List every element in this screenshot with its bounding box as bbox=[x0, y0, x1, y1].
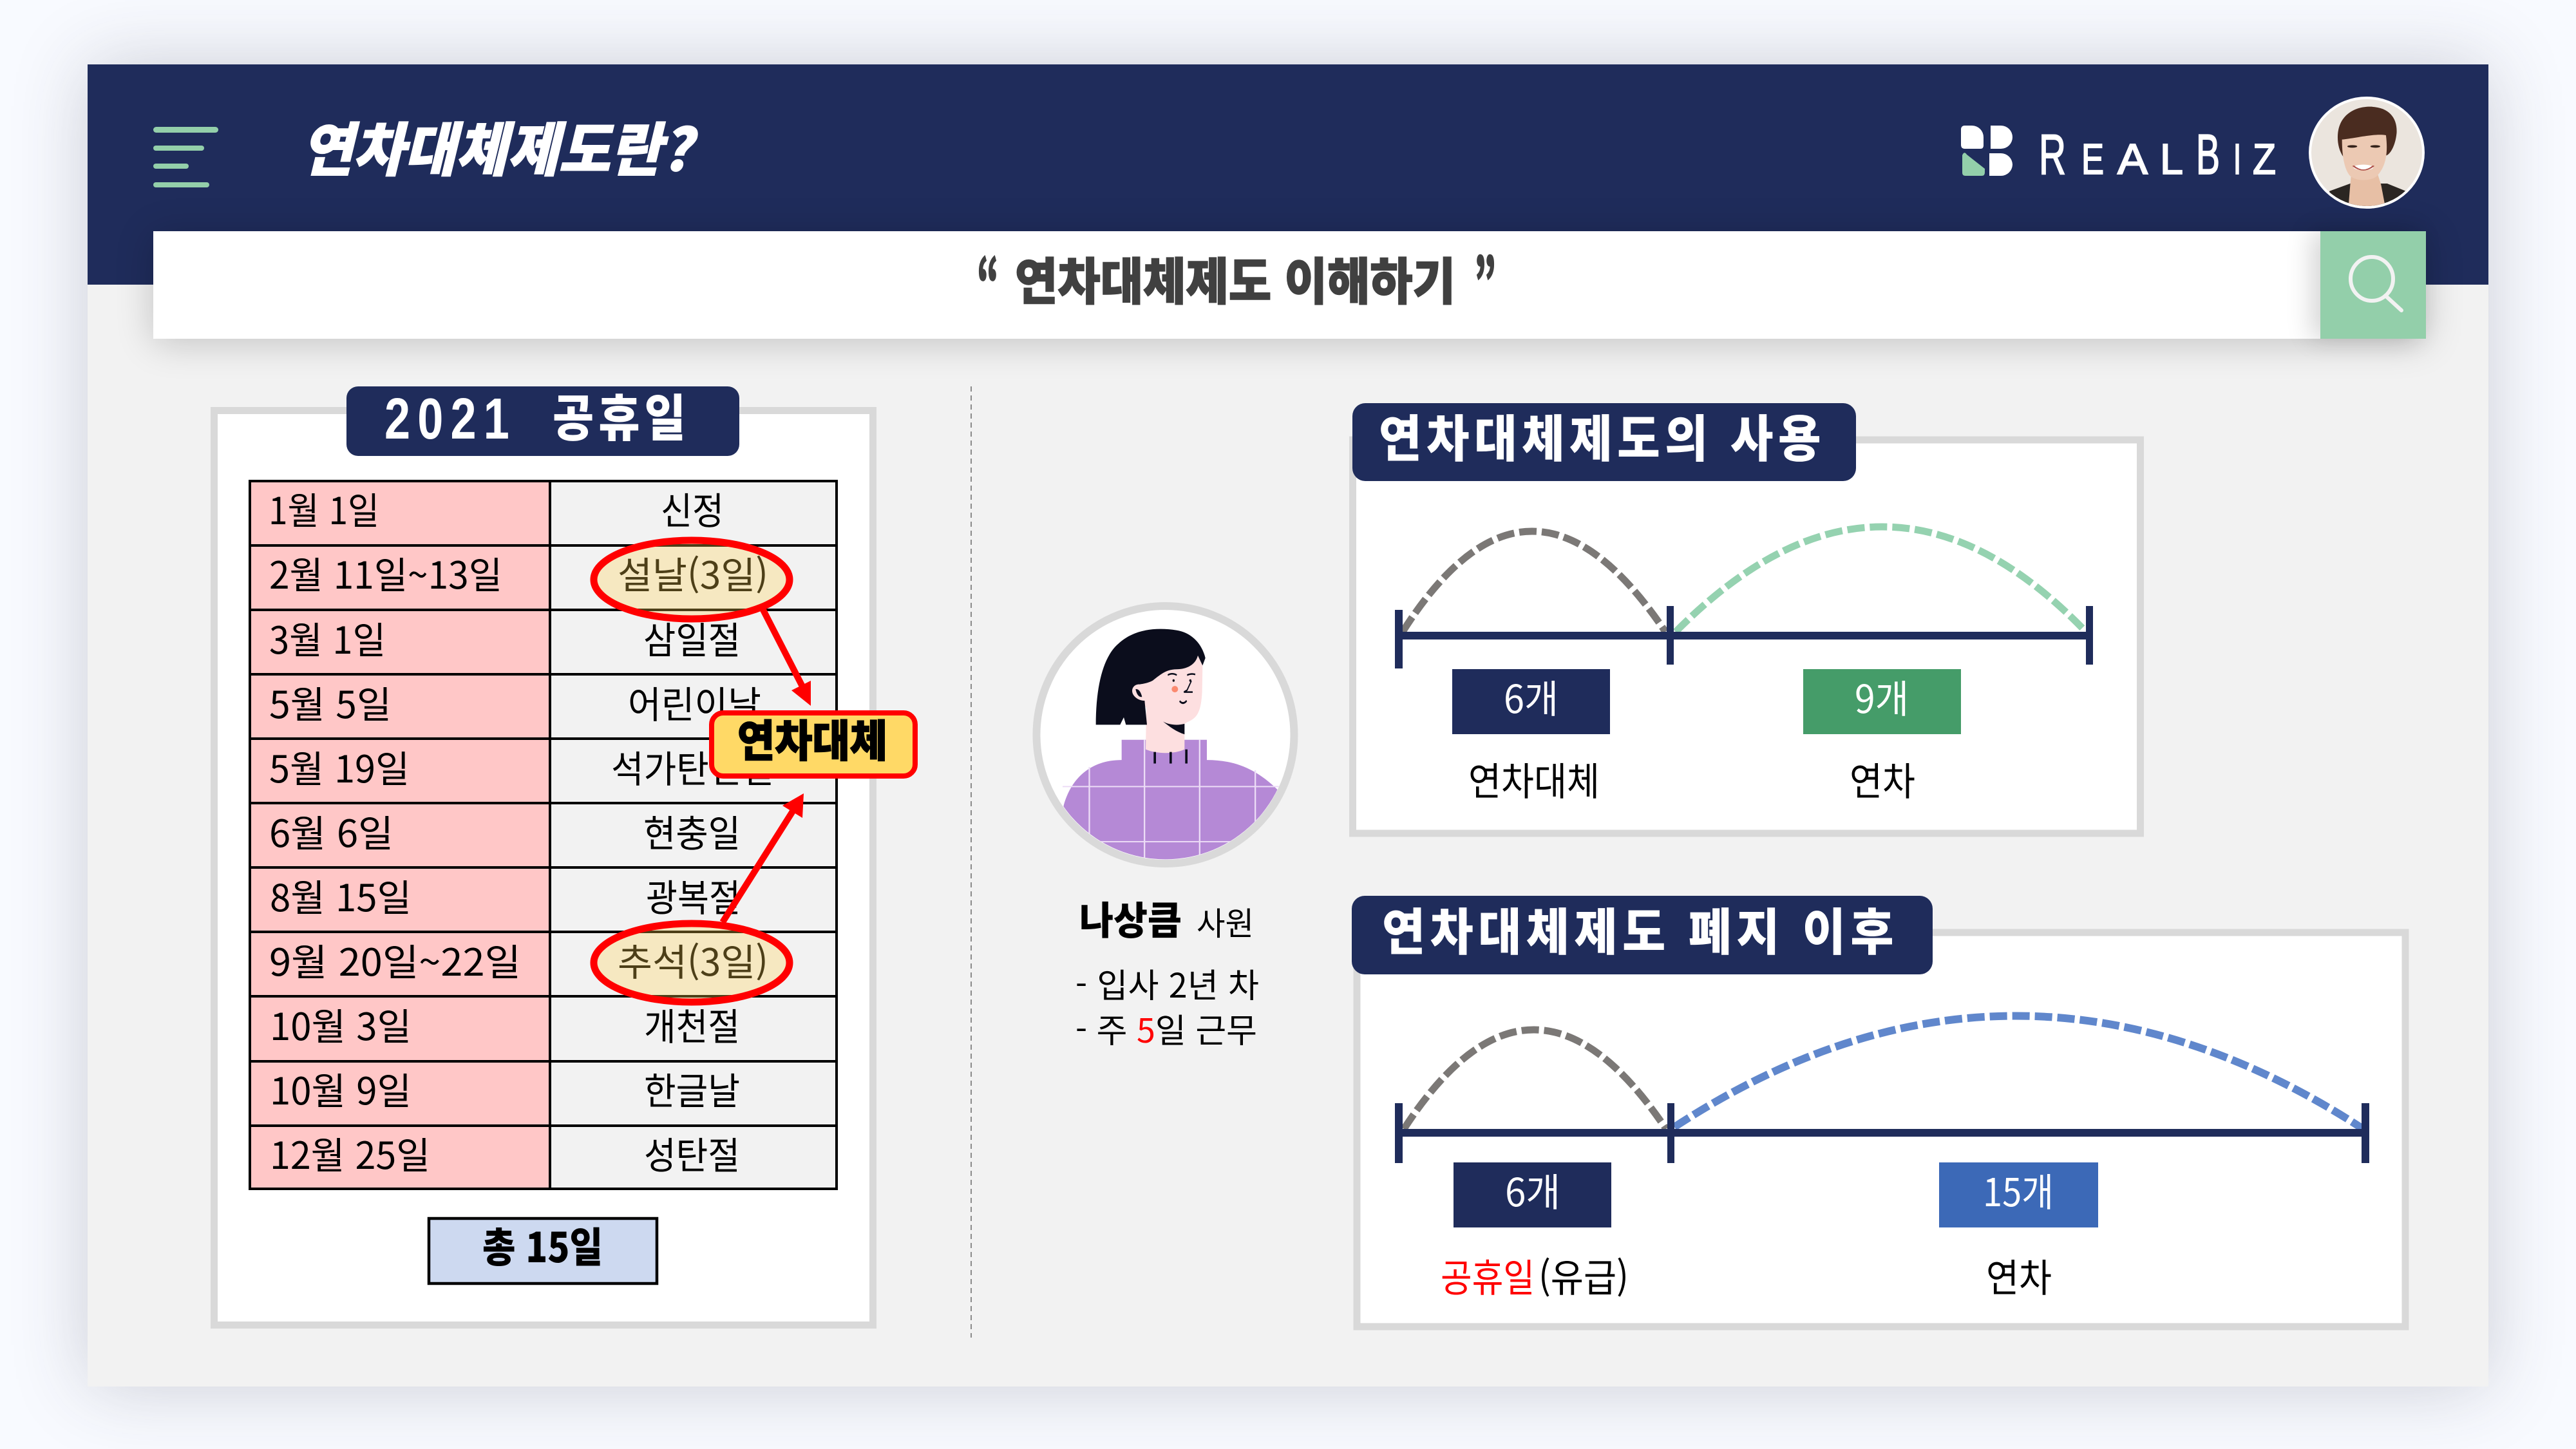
holiday table: 10월 3일 bbox=[270, 997, 412, 1051]
employee details: - 입사 2년 차 bbox=[1075, 959, 1259, 1007]
label: 공휴일(유급): 공휴일 bbox=[1441, 1247, 1535, 1303]
holiday table: 9월 20일~22일 bbox=[269, 933, 521, 987]
holiday table: 추석(3일) bbox=[618, 933, 768, 987]
holiday table: 개천절 bbox=[644, 997, 740, 1051]
panel heading: 연차대체제도의 사용 bbox=[1379, 399, 1826, 471]
holiday table: 6월 6일 bbox=[269, 804, 393, 858]
panel heading: 2021 공휴일: 2021 bbox=[384, 387, 516, 451]
callout: 연차대체: 연차대체 bbox=[737, 706, 887, 770]
search bar bbox=[153, 231, 2426, 339]
label box: 15개 bbox=[1939, 1162, 2098, 1227]
label: 연차: 연차 bbox=[1850, 751, 1915, 807]
logo: RealBiz bbox=[1961, 122, 2276, 186]
holiday table: 5월 5일 bbox=[269, 675, 392, 729]
panel: after abolition bbox=[1352, 893, 2405, 1327]
holiday table: 광복절 bbox=[646, 868, 741, 922]
icon: hamburger menu bbox=[153, 127, 218, 187]
logo wordmark: I bbox=[2233, 135, 2241, 184]
holiday table: 현충일 bbox=[643, 804, 741, 858]
employee details: - 주 5일 근무 bbox=[1075, 1004, 1257, 1052]
holiday table bbox=[249, 480, 837, 1189]
timeline chart bbox=[1395, 1016, 2369, 1163]
highlight: 추석 bbox=[594, 923, 790, 1002]
holiday table: 8월 15일 bbox=[270, 868, 412, 922]
panel: usage of annual leave substitution bbox=[1352, 399, 2141, 833]
logo wordmark bbox=[2039, 122, 2276, 186]
holiday table: 어린이날 bbox=[628, 675, 761, 729]
icon: logo mark bbox=[1961, 126, 2012, 176]
label box: 6개 bbox=[1454, 1162, 1611, 1227]
icon: magnifying glass bbox=[2351, 257, 2401, 310]
arrow: 설날 to 연차대체 bbox=[763, 610, 811, 706]
label box: 6개: 6개 bbox=[1505, 1162, 1560, 1218]
label box: 9개 bbox=[1803, 668, 1961, 734]
employee details bbox=[1075, 959, 1259, 1052]
total: 15 days: 총 15일 bbox=[482, 1215, 603, 1274]
logo wordmark: E bbox=[2081, 135, 2104, 184]
holiday table: 2월 11일~13일 bbox=[269, 545, 502, 600]
holiday table: 성탄절 bbox=[644, 1126, 740, 1180]
profile photo bbox=[2306, 97, 2428, 211]
holiday table: 한글날 bbox=[644, 1061, 740, 1115]
label: 연차대체: 연차대체 bbox=[1468, 751, 1600, 807]
highlight: 설날 bbox=[594, 540, 790, 619]
logo wordmark: Z bbox=[2253, 135, 2276, 184]
panel heading: 2021 공휴일 bbox=[346, 379, 739, 456]
arrow: 추석 to 연차대체 bbox=[723, 793, 804, 922]
label box: 6개 bbox=[1452, 668, 1610, 734]
search button bbox=[2320, 231, 2426, 339]
label: 연차: 연차 bbox=[1986, 1247, 2052, 1303]
title: 연차대체제도란? bbox=[301, 104, 699, 187]
employee avatar bbox=[1037, 606, 1294, 868]
logo wordmark: L bbox=[2160, 135, 2183, 184]
label box: 6개: 6개 bbox=[1504, 668, 1558, 724]
holiday table: 신정 bbox=[661, 481, 724, 535]
panel heading: 연차대체제도 폐지 이후 bbox=[1382, 893, 1899, 965]
holiday table: 석가탄신일 bbox=[611, 739, 774, 793]
holiday table: 5월 19일 bbox=[269, 739, 410, 793]
holiday table: 삼일절 bbox=[643, 611, 741, 665]
logo wordmark: A bbox=[2117, 135, 2148, 184]
timeline chart bbox=[1395, 527, 2093, 668]
holiday table: 3월 1일 bbox=[269, 611, 386, 665]
logo wordmark: B bbox=[2196, 122, 2220, 186]
employee name: 나상큼 bbox=[1079, 890, 1182, 946]
logo wordmark: R bbox=[2039, 122, 2066, 186]
label box: 9개: 9개 bbox=[1855, 668, 1909, 724]
holiday table: 설날(3일) bbox=[618, 545, 768, 600]
panel heading: 2021 공휴일: 공휴일 bbox=[553, 379, 690, 451]
total: 15 days bbox=[429, 1215, 657, 1283]
header band bbox=[88, 64, 2488, 285]
label: 공휴일(유급): (유급) bbox=[1539, 1247, 1629, 1303]
holiday table: 10월 9일 bbox=[270, 1061, 412, 1115]
subtitle: “ bbox=[977, 232, 999, 322]
employee name bbox=[1079, 890, 1254, 946]
holiday table: 12월 25일 bbox=[270, 1126, 430, 1180]
holiday table: 1월 1일 bbox=[269, 481, 379, 535]
subtitle: ” bbox=[1474, 232, 1496, 322]
label box: 15개: 15개 bbox=[1983, 1162, 2054, 1218]
label: 공휴일(유급) bbox=[1441, 1247, 1629, 1303]
panel: 2021 holidays bbox=[214, 379, 873, 1325]
employee name: 사원 bbox=[1197, 898, 1254, 945]
subtitle: 연차대체제도 이해하기 bbox=[1015, 242, 1455, 314]
